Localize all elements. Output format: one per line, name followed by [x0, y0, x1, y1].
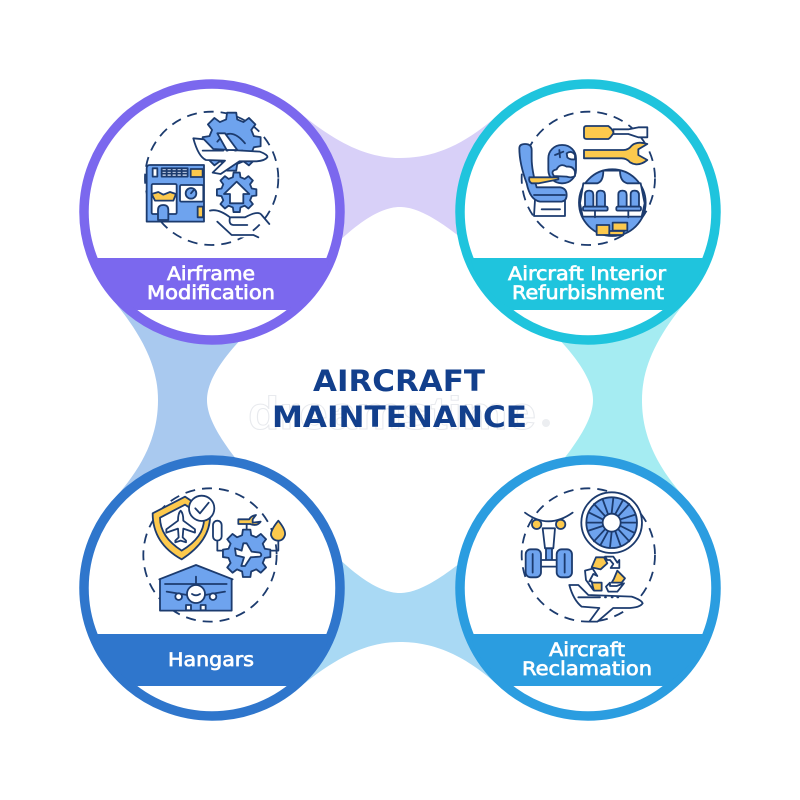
- panel: Hangars: [84, 460, 340, 716]
- label: [508, 264, 666, 304]
- label band: [471, 258, 705, 310]
- label: Hangars: [168, 650, 254, 671]
- icon: aircraft reclamation: [522, 488, 655, 622]
- label: Aircraft: [549, 640, 625, 661]
- label: Airframe: [167, 264, 255, 285]
- label: [522, 640, 652, 680]
- label: Reclamation: [522, 659, 652, 680]
- label: Refurbishment: [512, 283, 664, 304]
- connector: top: [300, 113, 500, 245]
- icon: cabin refurbishment: [519, 112, 655, 245]
- label: [147, 264, 275, 304]
- label band: [95, 258, 329, 310]
- ring: [84, 460, 340, 716]
- ring: [460, 460, 716, 716]
- label band: [95, 634, 329, 686]
- connector: bottom: [300, 555, 500, 687]
- ring: [84, 84, 340, 340]
- label: Modification: [147, 283, 275, 304]
- label band: [471, 634, 705, 686]
- title: [272, 364, 527, 434]
- title: MAINTENANCE: [272, 400, 527, 434]
- panel: Airframe Modification: [84, 84, 340, 340]
- icon: airframe upgrades: [145, 112, 278, 245]
- label: Aircraft Interior: [508, 264, 666, 285]
- title: AIRCRAFT: [313, 364, 485, 398]
- connector: left: [113, 300, 245, 500]
- ring: [460, 84, 716, 340]
- center watermark: dreamstime: [248, 387, 536, 439]
- icon: hangar safety: [143, 488, 285, 622]
- panel: Aircraft Interior Refurbishment: [460, 84, 716, 340]
- panel: Aircraft Reclamation: [460, 460, 716, 716]
- connector: right: [555, 300, 687, 500]
